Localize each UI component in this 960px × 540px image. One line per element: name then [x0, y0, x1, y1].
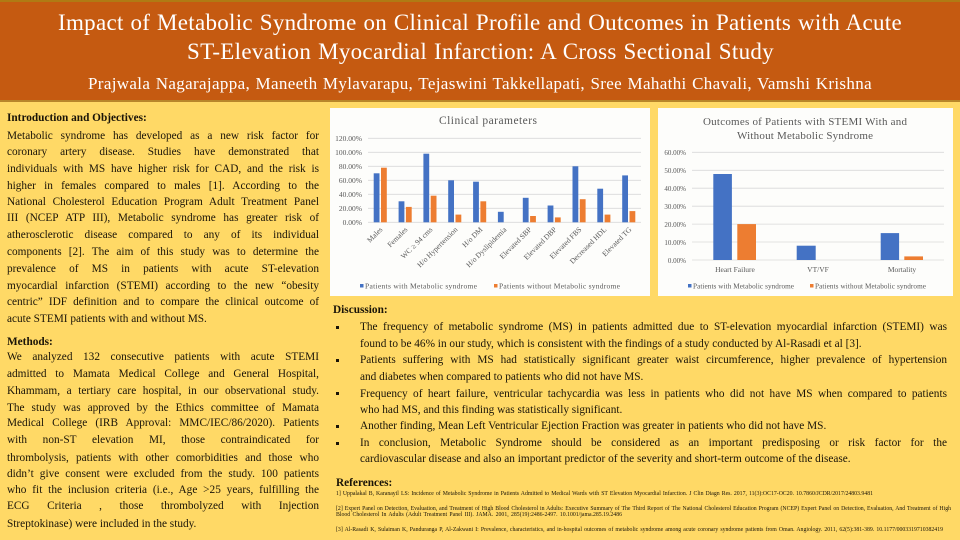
category labels: Decreased HDL: [568, 225, 609, 266]
category labels: Elevated TG: [600, 225, 634, 258]
y axis labels: 60.00%: [664, 149, 686, 157]
legend: Patients without Metabolic syndrome: [815, 282, 926, 290]
text block: introduction body: myocardial infarction (STEMI) according to the new “obesity: [7, 280, 319, 292]
authors: Prajwala Nagarajappa, Maneeth Mylavarapu, Tejaswini Takkellapati, Sree Mahathi Chavali, Vamshi Krishna: [88, 74, 872, 93]
text block: methods body: didn’t give consent were excluded from the study. 100 patients: [7, 468, 319, 480]
bullet list: discussion points: found to be 46% in our study, which is consistent with the findings of a study conducted by Al-Rasadi et al [3].: [360, 338, 862, 350]
chart title: [703, 116, 908, 142]
text block: methods body: Khammam, a tertiary care hospital, in our observational study.: [7, 385, 319, 397]
category labels: [715, 265, 916, 274]
heading: methods: Methods:: [7, 336, 53, 348]
y axis labels: 20.00%: [664, 221, 686, 229]
text block: reference list: [2] Expert Panel on Detection, Evaluation, and Treatment of High Blood Cholesterol in Adults: Executive Summary of The Third Report of The National Cholesterol Education Program (NCEP) Expert Panel on Detection, Evaluation, And Treatment of High: [336, 506, 951, 512]
text block: methods body: The study was approved by the Ethics committee of Mamata: [7, 402, 319, 414]
category labels: VT/VF: [807, 265, 829, 274]
chart panel: outcomes: [658, 108, 953, 296]
category labels: Elevated FBS: [548, 225, 583, 261]
y axis labels: 20.00%: [339, 204, 362, 213]
panel: methods: [7, 336, 319, 530]
text block: introduction body: acute STEMI patients with and without MS.: [7, 313, 207, 325]
chart title: Without Metabolic Syndrome: [737, 130, 873, 142]
header banner: [0, 0, 960, 102]
bullet list: discussion points: who had MS, and this finding was statistically significant.: [360, 404, 622, 416]
bullet list: discussion points: cardiovascular disease and also an important predictor of the severity and short-term outcome of the disease.: [360, 453, 851, 465]
text block: methods body: Streptokinase) were included in the study.: [7, 518, 196, 530]
text block: methods body: who fit the inclusion criteria (i.e., Age >25 years, fulfilling the: [7, 484, 319, 496]
heading: references: References:: [336, 477, 392, 489]
y axis labels: 60.00%: [339, 176, 362, 185]
category labels: Mortality: [888, 265, 916, 274]
panel: discussion: [333, 304, 947, 465]
y axis labels: 80.00%: [339, 162, 362, 171]
chart title: Outcomes of Patients with STEMI With and: [703, 116, 908, 128]
bullet list: discussion points: Frequency of heart failure, ventricular tachycardia was less in patients who did not have MS when compared to patients: [360, 388, 947, 400]
title: [58, 10, 902, 64]
category labels: Females: [385, 225, 409, 249]
text block: methods body: Medical College (IRB Approval: MMC/IEC/86/2020). Patients: [7, 417, 319, 429]
text block: introduction body: higher in females compared to males [1]. According to the: [7, 180, 319, 192]
bullet list: discussion points: Another finding, Mean Left Ventricular Ejection Fraction was greater in patients who did not have MS.: [360, 420, 826, 432]
bullet list: discussion points: and diabetes when compared to patients who did not have MS.: [360, 371, 643, 383]
title: ST-Elevation Myocardial Infarction: A Cross Sectional Study: [187, 39, 774, 64]
text block: introduction body: atherosclerotic disease compared to any of its individual: [7, 229, 319, 241]
y axis labels: 0.00%: [343, 218, 362, 227]
bars: patients without metabolic syndrome: [737, 224, 923, 260]
y axis labels: 10.00%: [664, 239, 686, 247]
bullet list: discussion points: In conclusion, Metabolic Syndrome should be considered as an important predisposing or risk factor for the: [360, 437, 947, 449]
panel: references: [336, 477, 951, 533]
category labels: Males: [365, 225, 384, 244]
text block: methods body: [7, 351, 319, 530]
y axis labels: 0.00%: [668, 257, 686, 265]
legend: Patients with Metabolic syndrome: [365, 282, 478, 290]
y axis labels: 120.00%: [335, 134, 362, 143]
text block: introduction body: individuals with MS have higher risk for CAD, and the risk is: [7, 163, 319, 175]
text block: introduction body: coronary artery disease. Studies have demonstrated that: [7, 146, 319, 158]
text block: introduction body: components [2]. The aim of this study was to determine the: [7, 246, 319, 258]
y axis labels: 40.00%: [339, 190, 362, 199]
title: Impact of Metabolic Syndrome on Clinical Profile and Outcomes in Patients with Acute: [58, 10, 902, 35]
bullet list: discussion points: Patients suffering with MS had statistically significant greater waist circumference, higher prevalence of hypertension: [360, 354, 947, 366]
bars: patients without metabolic syndrome: [381, 168, 635, 222]
text block: methods body: ECG Criteria , those thrombolyzed with Injection: [7, 500, 319, 512]
category labels: WC ≥ 94 cms: [399, 225, 434, 261]
text block: introduction body: Metabolic syndrome has developed as a new risk factor for: [7, 130, 319, 142]
category labels: Heart Failure: [715, 265, 756, 274]
bullet list: discussion points: [336, 321, 947, 465]
legend: Patients without Metabolic syndrome: [499, 282, 621, 290]
category labels: H/o DM: [460, 225, 485, 249]
text block: reference list: 1] Uppalakal B, Karanayil LS: Incidence of Metabolic Syndrome in Patients Admitted to Medical Wards with ST Elevation Myocardial Infarction. J Clin Diagn Res. 2017, 11(3):OC17-OC20. 10.7860/JCDR/2017/24803.9481: [336, 491, 873, 497]
text block: methods body: We analyzed 132 consecutive patients with acute STEMI: [7, 351, 319, 363]
legend: [688, 282, 926, 290]
category labels: [365, 225, 634, 269]
text block: reference list: Blood Cholesterol In Adults (Adult Treatment Panel III). JAMA. 2001, 285(19):2486-2497. 10.1001/jama.285.19.2486: [336, 512, 622, 518]
legend: [360, 282, 621, 290]
category labels: H/o Dyslipidemia: [464, 225, 509, 269]
bullet list: discussion points: The frequency of metabolic syndrome (MS) in patients admitted due to ST-elevation myocardial infarction (STEMI) was: [360, 321, 947, 333]
category labels: Elevated DBP: [522, 225, 558, 262]
category labels: H/o Hypertension: [415, 225, 460, 269]
bars: patients with metabolic syndrome: [713, 174, 899, 260]
text block: reference list: [3] Al-Rasadi K, Sulaiman K, Panduranga P, Al-Zakwani I: Prevalence, characteristics, and in-hospital outcomes of metabolic syndrome among acute coronary syndrome patients from Oman. Angiology. 2011, 62(5):381-389. 10.1177/0003319710382419: [336, 527, 943, 533]
y axis labels: 30.00%: [664, 203, 686, 211]
y axis labels: 100.00%: [335, 148, 362, 157]
text block: introduction body: prevalence of MS in patients with acute ST-elevation: [7, 263, 319, 275]
text block: methods body: admitted to Mamata Medical College and General Hospital,: [7, 368, 319, 380]
text block: introduction body: III (NCEP ATP III), Metabolic syndrome has greater risk of: [7, 212, 319, 224]
y axis labels: [335, 134, 362, 227]
y axis labels: [664, 149, 686, 265]
heading: introduction: Introduction and Objectives:: [7, 112, 147, 124]
bars: patients with metabolic syndrome: [374, 154, 628, 222]
legend: Patients with Metabolic syndrome: [693, 282, 794, 290]
text block: methods body: with non-ST elevation MI, those contraindicated for: [7, 434, 319, 446]
panel: introduction and objectives: [7, 112, 319, 325]
text block: introduction body: National Cholesterol Education Program Adult Treatment Panel: [7, 196, 319, 208]
text block: introduction body: centric” IDF definition and to compare the clinical outcome of: [7, 296, 319, 308]
text block: reference list: [336, 490, 951, 533]
text block: introduction body: [7, 130, 319, 325]
text block: methods body: thrombolysis, patients with other comorbidities and those who: [7, 452, 319, 464]
heading: discussion: Discussion:: [333, 304, 388, 316]
y axis labels: 40.00%: [664, 185, 686, 193]
chart panel: clinical parameters: [330, 108, 650, 296]
chart title: Clinical parameters: [439, 115, 538, 127]
y axis labels: 50.00%: [664, 167, 686, 175]
category labels: Elevated SBP: [498, 225, 533, 261]
